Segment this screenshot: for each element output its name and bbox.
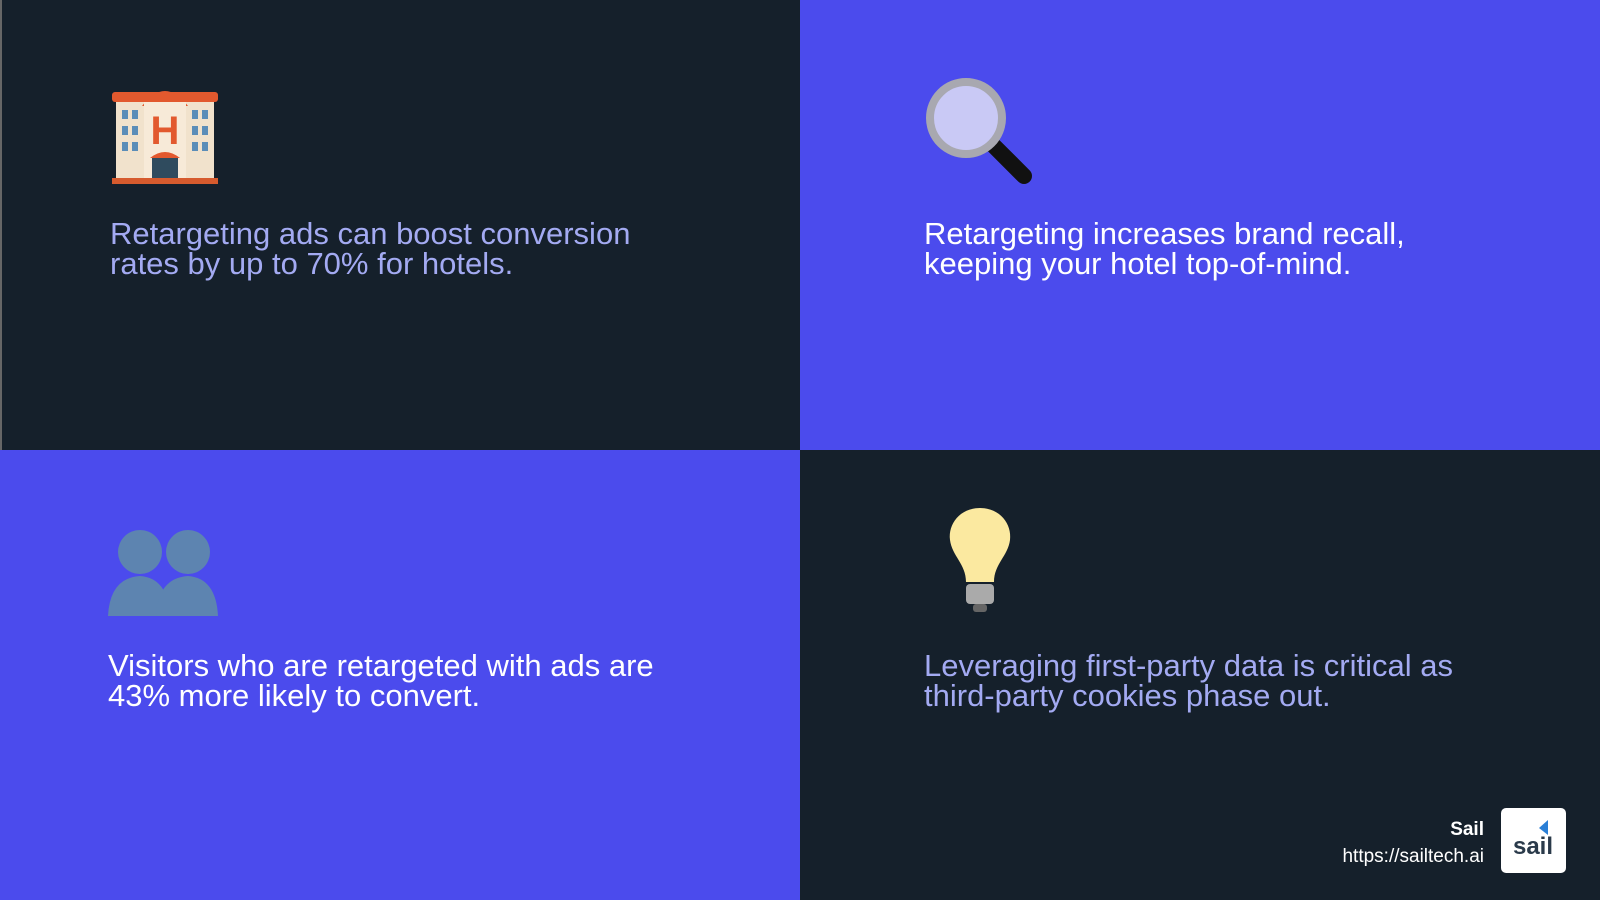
text: visitors stat: Visitors who are retargeted with ads are 43% more likely to convert.	[108, 648, 654, 713]
panel: first-party data	[800, 450, 1600, 900]
brand text: Sail	[1450, 819, 1484, 840]
text: brand recall: Retargeting increases brand recall, keeping your hotel top-of-mind.	[924, 216, 1405, 281]
icon: hotel: H	[151, 109, 179, 153]
brand: sail	[1342, 808, 1566, 873]
logo	[1501, 808, 1566, 873]
logo: sail	[1513, 833, 1553, 860]
brand text	[1342, 819, 1484, 867]
text: first-party data: Leveraging first-party data is critical as third-party cookies phase out.	[924, 648, 1453, 713]
panel: visitors	[0, 450, 800, 900]
panel: brand recall	[800, 0, 1600, 450]
icon: light bulb	[950, 508, 1010, 612]
brand text: https://sailtech.ai	[1342, 846, 1484, 867]
text: conversion stat: Retargeting ads can boost conversion rates by up to 70% for hotels.	[110, 216, 630, 281]
icon: people	[108, 530, 218, 616]
icon: magnifier	[926, 78, 1032, 184]
icon: hotel	[112, 91, 218, 184]
panel: conversion	[0, 0, 800, 450]
